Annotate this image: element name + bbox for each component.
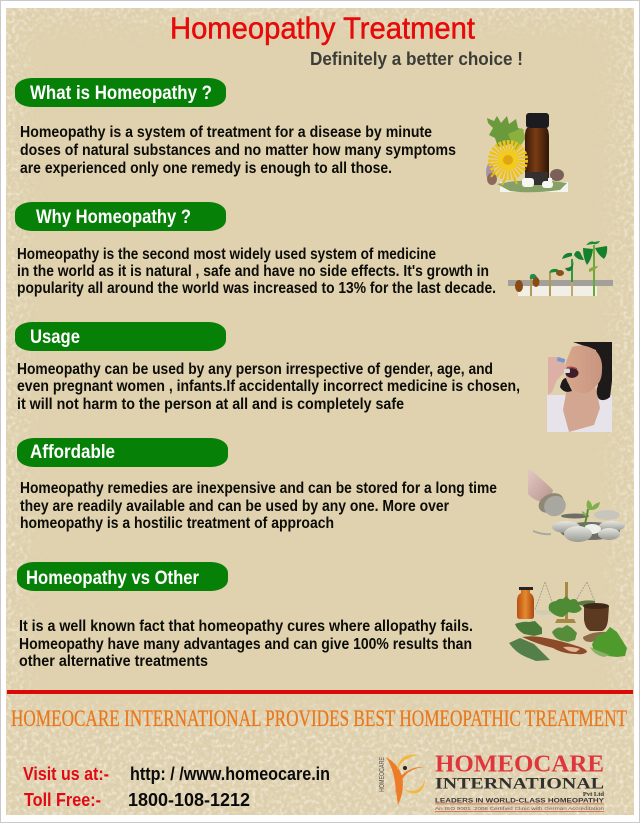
text block: homeopathy vs other: It is a well known fact that homeopathy cures where allopathy fails. (19, 618, 473, 635)
contact details: Visit us at:- (23, 764, 109, 784)
text block: affordable: they are readily available and can be used by any one. More over (20, 498, 449, 515)
icon: growing seedlings (508, 241, 613, 296)
text block: homeopathy vs other: Homeopathy have many advantages and can give 100% results than (19, 636, 472, 653)
text block: why homeopathy: in the world as it is natural , safe and have no side effects. It's growth in (17, 263, 489, 280)
heading pill: usage (15, 322, 226, 351)
text block: what is homeopathy: Homeopathy is a system of treatment for a disease by minute (20, 124, 432, 141)
contact details: Toll Free:- (24, 790, 101, 810)
logo: homeocare international: An ISO 9001 :2008 Certified Clinic with German Accreditation (435, 806, 605, 811)
heading pill: what is homeopathy: What is Homeopathy ? (30, 82, 212, 104)
logo: homeocare international: LEADERS IN WORLD-CLASS HOMEOPATHY (435, 798, 605, 804)
logo: homeocare international (379, 752, 605, 812)
text block: affordable: homeopathy is a hostilic treatment of approach (20, 515, 334, 532)
text block: what is homeopathy: are experienced only one remedy is enough to all those. (20, 160, 392, 177)
panel: why homeopathy (15, 202, 613, 297)
panel: affordable (17, 438, 625, 542)
subtitle: Definitely a better choice ! (310, 49, 523, 69)
contact details (23, 764, 330, 810)
icon: remedy bottle with flower (486, 113, 568, 192)
heading pill: what is homeopathy (15, 78, 226, 107)
text block: why homeopathy: popularity all around the world was increased to 13% for the last decade. (17, 280, 496, 297)
text block: why homeopathy (17, 246, 496, 297)
icon: coins and sprout (528, 470, 625, 542)
heading pill: why homeopathy (15, 202, 226, 231)
panel: homeopathy vs other (17, 562, 627, 670)
contact details: http: / /www.homeocare.in (130, 764, 330, 784)
text block: usage: it will not harm to the person at all and is completely safe (17, 396, 404, 413)
text block: affordable: Homeopathy remedies are inexpensive and can be stored for a long time (20, 480, 497, 497)
text block: usage: Homeopathy can be used by any person irrespective of gender, age, and (17, 361, 493, 378)
text block: usage (17, 361, 520, 413)
text block: why homeopathy: Homeopathy is the second most widely used system of medicine (17, 246, 436, 263)
text block: usage: even pregnant women , infants.If accidentally incorrect medicine is chosen, (17, 378, 520, 395)
heading pill: affordable (17, 438, 228, 467)
logo: homeocare international: HOMEOCARE (435, 752, 604, 778)
text block: homeopathy vs other (19, 618, 473, 670)
text block: what is homeopathy: doses of natural substances and no matter how many symptoms (20, 142, 456, 159)
title: Homeopathy Treatment (170, 10, 475, 46)
logo: homeocare international: INTERNATIONAL (435, 776, 604, 792)
icon: logo figure: HOMEOCARE (379, 757, 386, 792)
panel: what is homeopathy (15, 78, 568, 192)
heading pill: homeopathy vs other: Homeopathy vs Other (26, 567, 199, 589)
panel: usage (15, 322, 612, 432)
text block: affordable (20, 480, 497, 532)
heading pill: affordable: Affordable (30, 441, 115, 463)
divider rule (7, 690, 633, 694)
contact details: 1800-108-1212 (128, 790, 250, 810)
logo: homeocare international: Pvt Ltd (583, 791, 604, 798)
heading pill: usage: Usage (30, 326, 80, 348)
text block: what is homeopathy (20, 124, 456, 177)
icon: herbs, mortar and scale (509, 582, 627, 661)
text block: homeopathy vs other: other alternative treatments (19, 653, 208, 670)
icon: logo figure (379, 755, 425, 805)
heading pill: why homeopathy: Why Homeopathy ? (36, 206, 191, 228)
icon: woman taking remedy (547, 342, 612, 432)
